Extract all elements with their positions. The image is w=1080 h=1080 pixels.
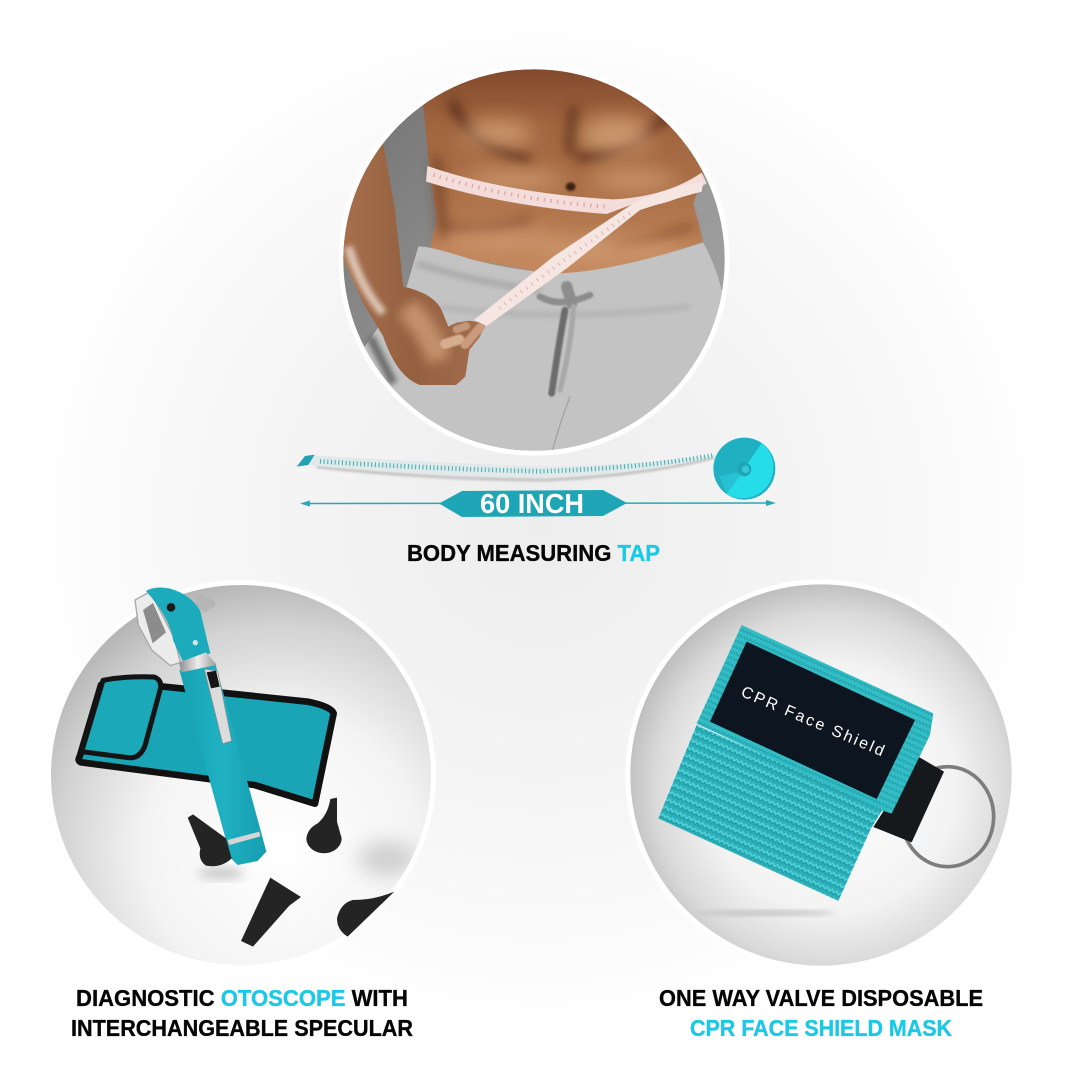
panel: otoscope kit photo — [46, 580, 436, 970]
speculum tip — [196, 593, 216, 612]
caption: otoscope: INTERCHANGEABLE SPECULAR — [71, 1015, 413, 1041]
circle frame — [625, 579, 1017, 971]
metal tip — [297, 455, 315, 467]
photo: man measuring waist — [337, 60, 740, 460]
pouch flap — [697, 625, 933, 814]
label text: CPR Face Shield — [738, 684, 887, 760]
reel case — [713, 438, 775, 500]
floor shadow — [695, 910, 835, 916]
navel — [566, 182, 576, 191]
panel: body measuring tape photo — [337, 60, 740, 460]
specula — [188, 798, 394, 947]
dimension label: 60 INCH — [480, 488, 584, 519]
loose tape end — [474, 182, 703, 326]
sweatpants — [360, 243, 727, 460]
pouch — [658, 725, 883, 901]
key ring — [902, 767, 994, 867]
soft case — [79, 677, 334, 804]
torso — [423, 60, 703, 273]
tape shadow — [317, 457, 713, 480]
pocket clip — [204, 669, 232, 744]
caption: otoscope — [71, 985, 413, 1041]
forearm and hand — [337, 143, 485, 385]
case flap — [82, 677, 161, 758]
caption: CPR face shield — [659, 985, 983, 1041]
dimension arrow — [300, 488, 776, 519]
base ring — [228, 832, 260, 845]
soft shadows — [198, 842, 418, 879]
banner — [439, 490, 627, 517]
circle frame — [46, 580, 436, 970]
caption: otoscope: DIAGNOSTIC OTOSCOPE WITH — [76, 985, 408, 1011]
circle backdrop — [51, 585, 431, 965]
circle backdrop — [630, 584, 1012, 966]
viewing window — [135, 592, 180, 666]
handle — [179, 662, 266, 865]
strap — [873, 757, 944, 842]
otoscope — [135, 587, 266, 865]
drawstring — [540, 287, 590, 393]
black label — [710, 642, 915, 799]
caption: CPR face shield: CPR FACE SHIELD MASK — [690, 1015, 952, 1041]
tape strip — [310, 455, 715, 477]
caption: body measuring tap: BODY MEASURING TAP — [407, 540, 660, 566]
circle frame — [338, 64, 730, 456]
caption: CPR face shield: ONE WAY VALVE DISPOSABLE — [659, 985, 983, 1011]
infographic canvas — [51, 69, 1012, 1036]
tape measure product — [297, 438, 775, 500]
panel: CPR face shield photo — [625, 579, 1017, 971]
head — [146, 587, 210, 661]
waist tape — [426, 166, 707, 214]
collar — [179, 652, 217, 672]
